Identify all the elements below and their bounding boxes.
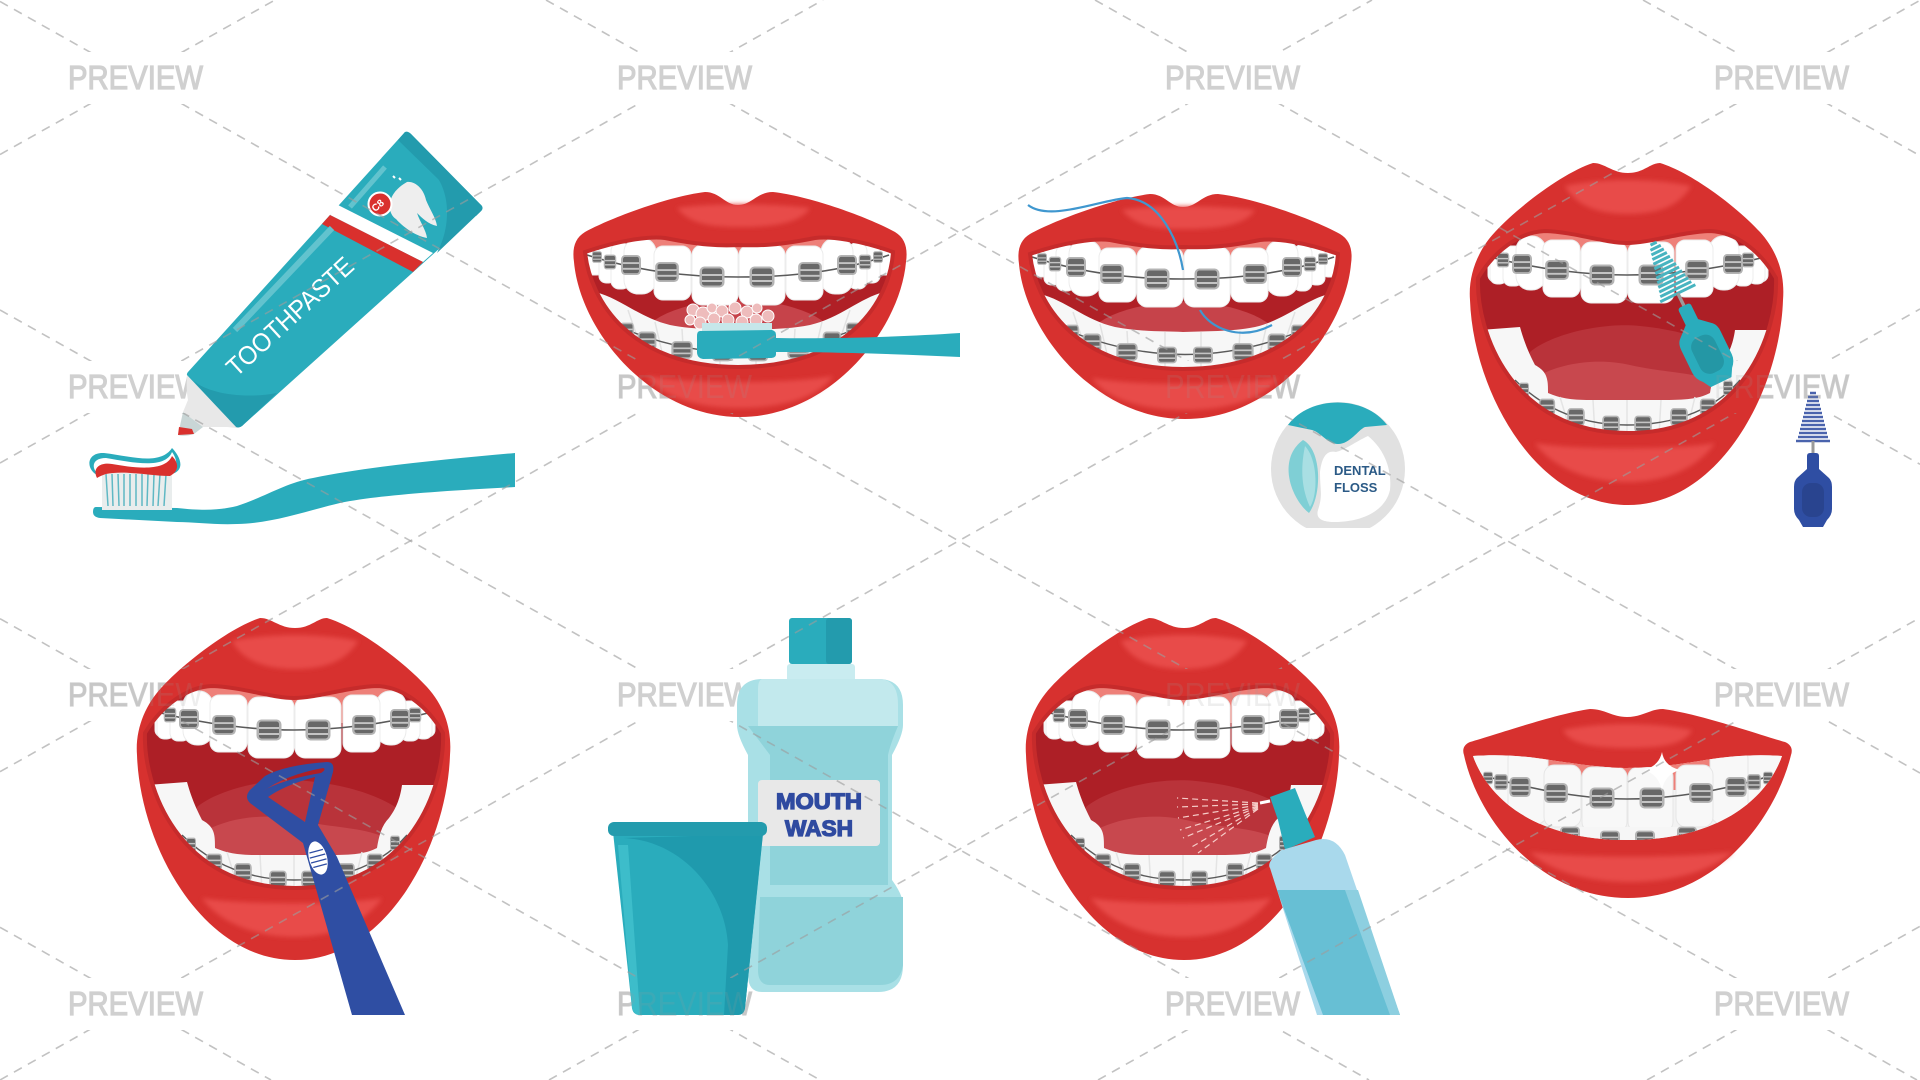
floss label: FLOSS [1334, 480, 1378, 495]
watermark text row base: PREVIEW [1165, 985, 1301, 1022]
watermark text row base: PREVIEW [68, 985, 204, 1022]
watermark text row base: PREVIEW [1714, 59, 1850, 96]
mouth: clean smile [1463, 709, 1792, 898]
watermark text row base: PREVIEW [1165, 368, 1301, 405]
icon: C8 badge [368, 192, 392, 216]
floss lid [1288, 402, 1387, 444]
teal interdental brush [1634, 234, 1741, 392]
dental floss thread [1028, 198, 1272, 333]
watermark text row base: PREVIEW [1165, 676, 1301, 713]
icon: C8 badge: C8 [370, 197, 387, 215]
toothbrush in mouth [697, 330, 960, 359]
watermark text row base: PREVIEW [68, 676, 204, 713]
spray mist [1177, 798, 1270, 853]
rinsing cup [608, 822, 767, 1015]
dental floss container [1271, 402, 1405, 536]
paste on brush [89, 448, 180, 478]
watermark text row base: PREVIEW [617, 368, 753, 405]
mouth: floss [1018, 194, 1352, 419]
watermark text row base: PREVIEW [617, 676, 753, 713]
mouthwash label text: MOUTH [776, 789, 862, 814]
watermark text overlay on artwork: PREVIEW [1165, 368, 1301, 405]
foam bubbles [685, 302, 774, 329]
toothbrush with paste [89, 448, 515, 524]
mouth: tongue scraper [137, 618, 452, 1015]
brush bristles [702, 323, 772, 332]
floss label: DENTAL [1334, 463, 1386, 478]
toothpaste tube [178, 132, 482, 436]
watermark text row base: PREVIEW [1714, 985, 1850, 1022]
floss label [1334, 466, 1386, 492]
scraper grip [305, 839, 331, 877]
watermark text row base: PREVIEW [1714, 676, 1850, 713]
watermark text row base: PREVIEW [1165, 59, 1301, 96]
icon: sparkle [1644, 752, 1680, 790]
mouthwash bottle [737, 618, 903, 992]
watermark text overlay on artwork: PREVIEW [68, 676, 204, 713]
watermark text overlay on artwork: PREVIEW [617, 985, 753, 1022]
watermark text row base: PREVIEW [617, 985, 753, 1022]
tube nozzle [183, 375, 237, 428]
spray bottle nozzle [1270, 788, 1315, 850]
blue interdental brush [1794, 393, 1832, 527]
watermark text overlay on artwork [68, 368, 1850, 1022]
watermark text row base: PREVIEW [1714, 368, 1850, 405]
watermark text row base: PREVIEW [68, 368, 204, 405]
watermark text overlay on artwork: PREVIEW [1165, 676, 1301, 713]
watermark text overlay on artwork: PREVIEW [617, 368, 753, 405]
mouthwash label text: WASH [785, 816, 853, 841]
watermark text overlay on artwork: PREVIEW [1714, 368, 1850, 405]
mouth: brushing [573, 192, 960, 417]
spray bottle [1269, 839, 1400, 1015]
floss spool window [1289, 440, 1318, 513]
mouth: interdental brush [1470, 163, 1785, 505]
icon: tooth on tube [390, 176, 437, 238]
watermark text row base: PREVIEW [617, 59, 753, 96]
paste squeezing from nozzle [178, 412, 203, 436]
tube label text: TOOTHPASTE [220, 251, 360, 382]
cap [789, 618, 852, 664]
mouthwash label text [776, 789, 862, 841]
watermark text row base: PREVIEW [68, 59, 204, 96]
tongue scraper [247, 762, 405, 1015]
mouth: spray [1026, 618, 1400, 1015]
